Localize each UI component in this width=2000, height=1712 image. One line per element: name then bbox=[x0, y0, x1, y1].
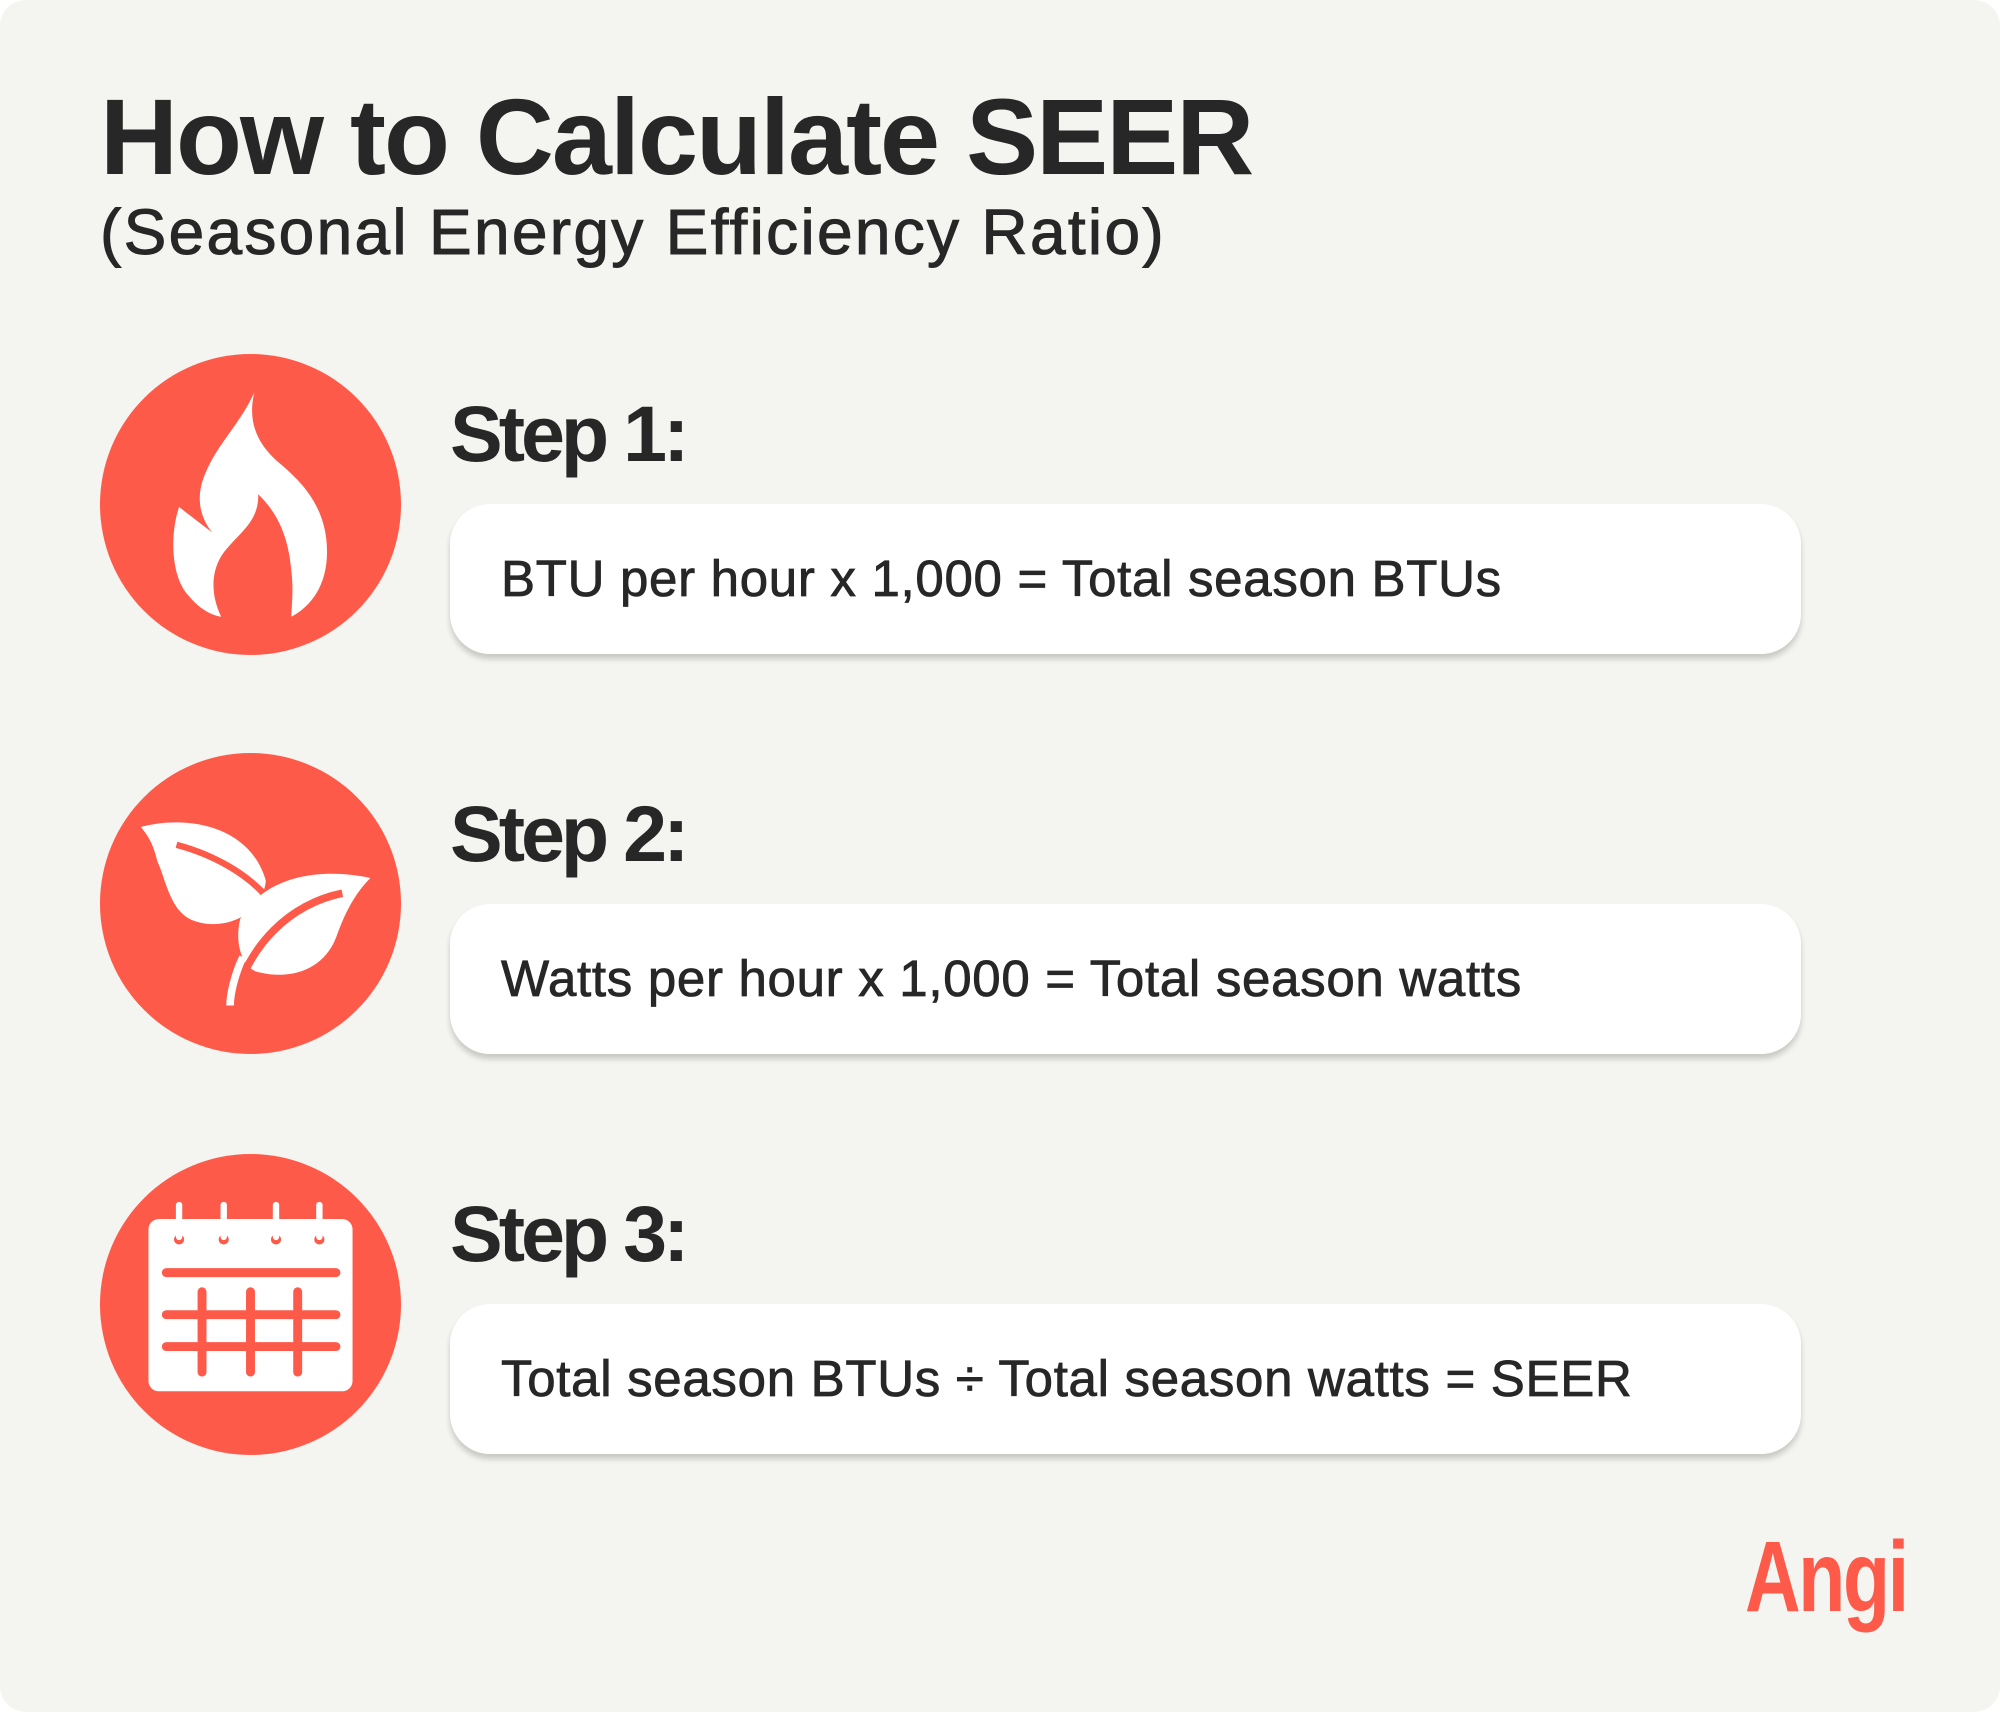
step 3 box bbox=[450, 1304, 1801, 1454]
step 2 heading: Step 2: bbox=[450, 789, 685, 878]
step 1 box: BTU per hour x 1,000 = Total season BTUs bbox=[501, 550, 1502, 607]
step 3 heading: Step 3: bbox=[450, 1189, 685, 1278]
icon: calendar bbox=[100, 1154, 401, 1455]
logo: Angi: Angi bbox=[1745, 1521, 1907, 1633]
step 2 box bbox=[450, 904, 1801, 1054]
step 1 box bbox=[450, 504, 1801, 654]
step 2 box: Watts per hour x 1,000 = Total season watts bbox=[501, 950, 1522, 1007]
icon: leaves bbox=[100, 753, 401, 1054]
step 3 box: Total season BTUs ÷ Total season watts = SEER bbox=[501, 1350, 1632, 1407]
icon: flame bbox=[100, 354, 401, 655]
title: How to Calculate SEER bbox=[100, 76, 1252, 197]
subtitle: (Seasonal Energy Efficiency Ratio) bbox=[100, 196, 1166, 268]
step 1 heading: Step 1: bbox=[450, 389, 685, 478]
